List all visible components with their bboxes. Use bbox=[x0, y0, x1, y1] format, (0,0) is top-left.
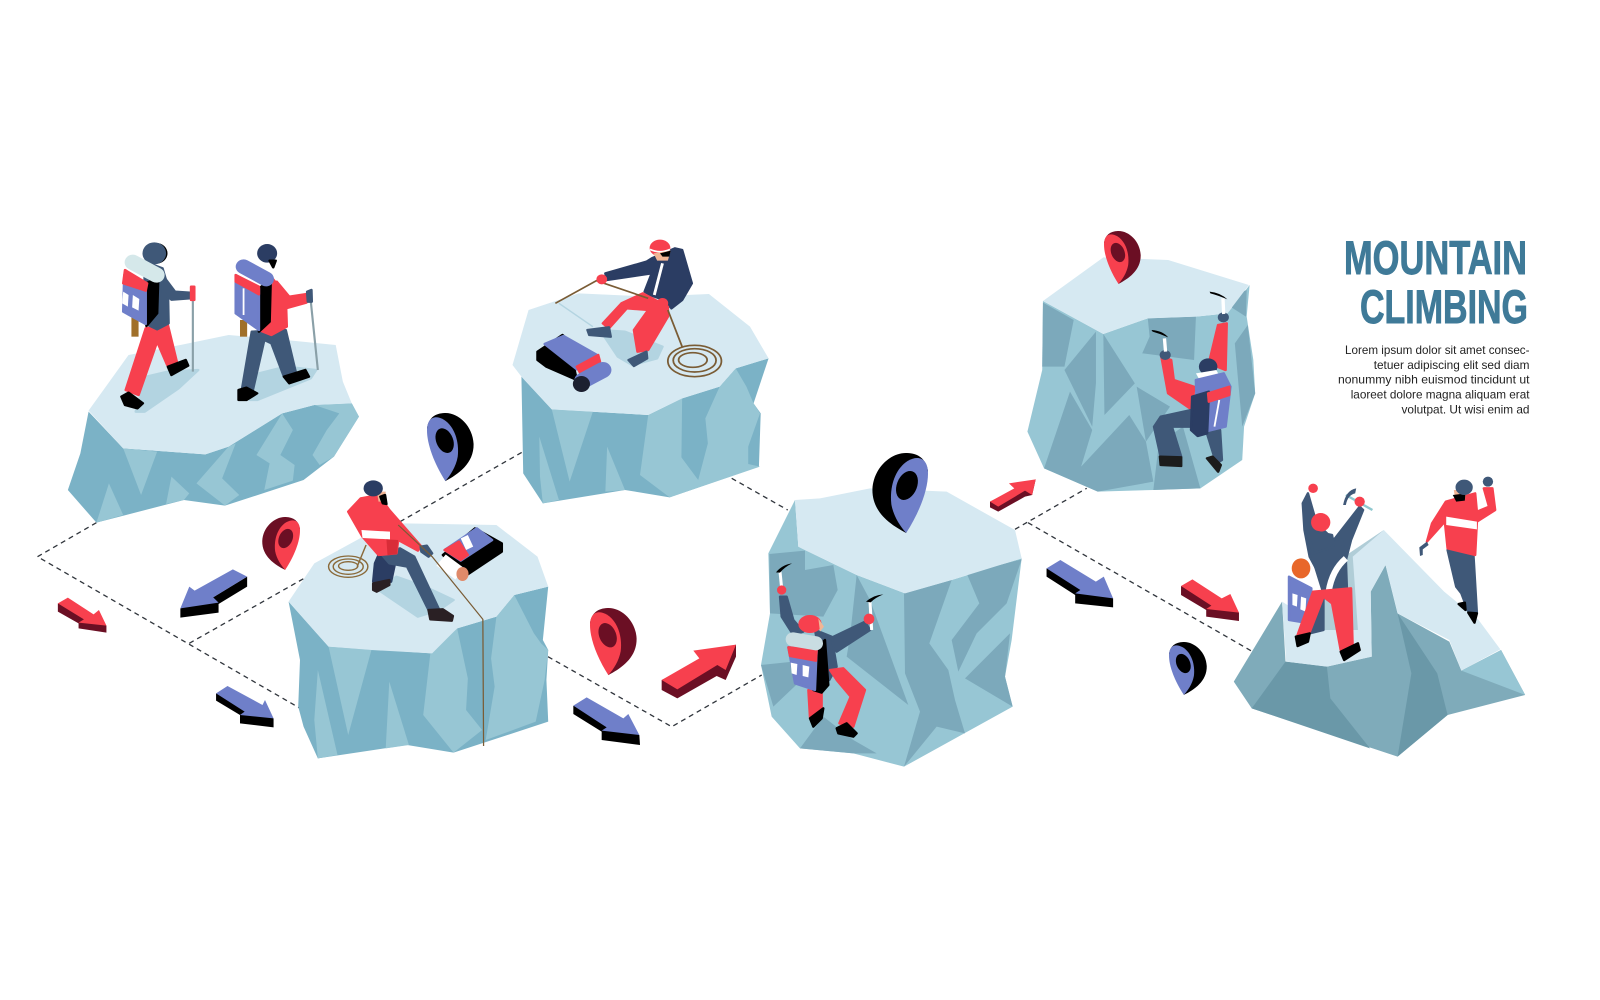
dashed route path bbox=[38, 452, 1251, 727]
arrow: blue, pointing down-left bbox=[180, 569, 247, 618]
icon: red map pin 3 bbox=[590, 608, 637, 675]
panel: ice block 5 with climber near top bbox=[1027, 257, 1255, 492]
icon: blue map pin 1 bbox=[427, 413, 474, 481]
panel: ice block 2 with rope puller bbox=[289, 480, 548, 758]
title: MOUNTAIN bbox=[1344, 231, 1527, 284]
figure: hiker in red trousers bbox=[121, 242, 198, 412]
panel: ice block 4 with wall climber bbox=[761, 488, 1022, 767]
arrow: blue, pointing down-right near block 5 bbox=[1047, 560, 1113, 607]
figure: climber on wall bbox=[1151, 292, 1230, 472]
arrow: large red, pointing up-right bbox=[662, 645, 736, 698]
panel: ice block 1 with two hikers bbox=[68, 242, 359, 523]
description text block: Lorem ipsum dolor sit amet consec- bbox=[1345, 343, 1530, 357]
panel: summit peak with two climbers bbox=[1234, 477, 1525, 757]
panel: ice block 3 with seated belayer bbox=[512, 240, 769, 503]
arrow: blue, pointing down-right below block 2 bbox=[573, 697, 640, 745]
icon: blue map pin 6 bbox=[1169, 642, 1207, 695]
figure: seated belayer with rope coil bbox=[537, 240, 721, 392]
description text block: nonummy nibh euismod tincidunt ut bbox=[1338, 373, 1530, 387]
figure: hiker in red jacket bbox=[236, 244, 318, 400]
description text block: tetuer adipiscing elit sed diam bbox=[1374, 358, 1530, 372]
arrow: small red, far left bbox=[58, 598, 106, 633]
description text block: volutpat. Ut wisi enim ad bbox=[1402, 402, 1530, 416]
figure: climber standing on slope bbox=[1419, 477, 1495, 623]
figure: celebrating climber on summit bbox=[1289, 484, 1372, 660]
description text block: laoreet dolore magna aliquam erat bbox=[1351, 388, 1530, 402]
figure: climber with ice axes bbox=[776, 563, 883, 737]
description text block bbox=[1338, 343, 1530, 416]
icon: red map pin 5 bbox=[1104, 231, 1141, 284]
title: CLIMBING bbox=[1360, 280, 1528, 333]
arrow: small red, pointing up-right bbox=[990, 479, 1036, 512]
title bbox=[1344, 231, 1528, 333]
arrow: red, pointing down-right toward peak bbox=[1181, 579, 1239, 621]
arrow: blue, pointing down-right under block 1 bbox=[216, 686, 274, 727]
icon: red map pin 2 bbox=[262, 517, 300, 570]
icon: blue map pin 4 bbox=[872, 453, 928, 533]
figure: climber pulling rope bbox=[329, 480, 502, 746]
